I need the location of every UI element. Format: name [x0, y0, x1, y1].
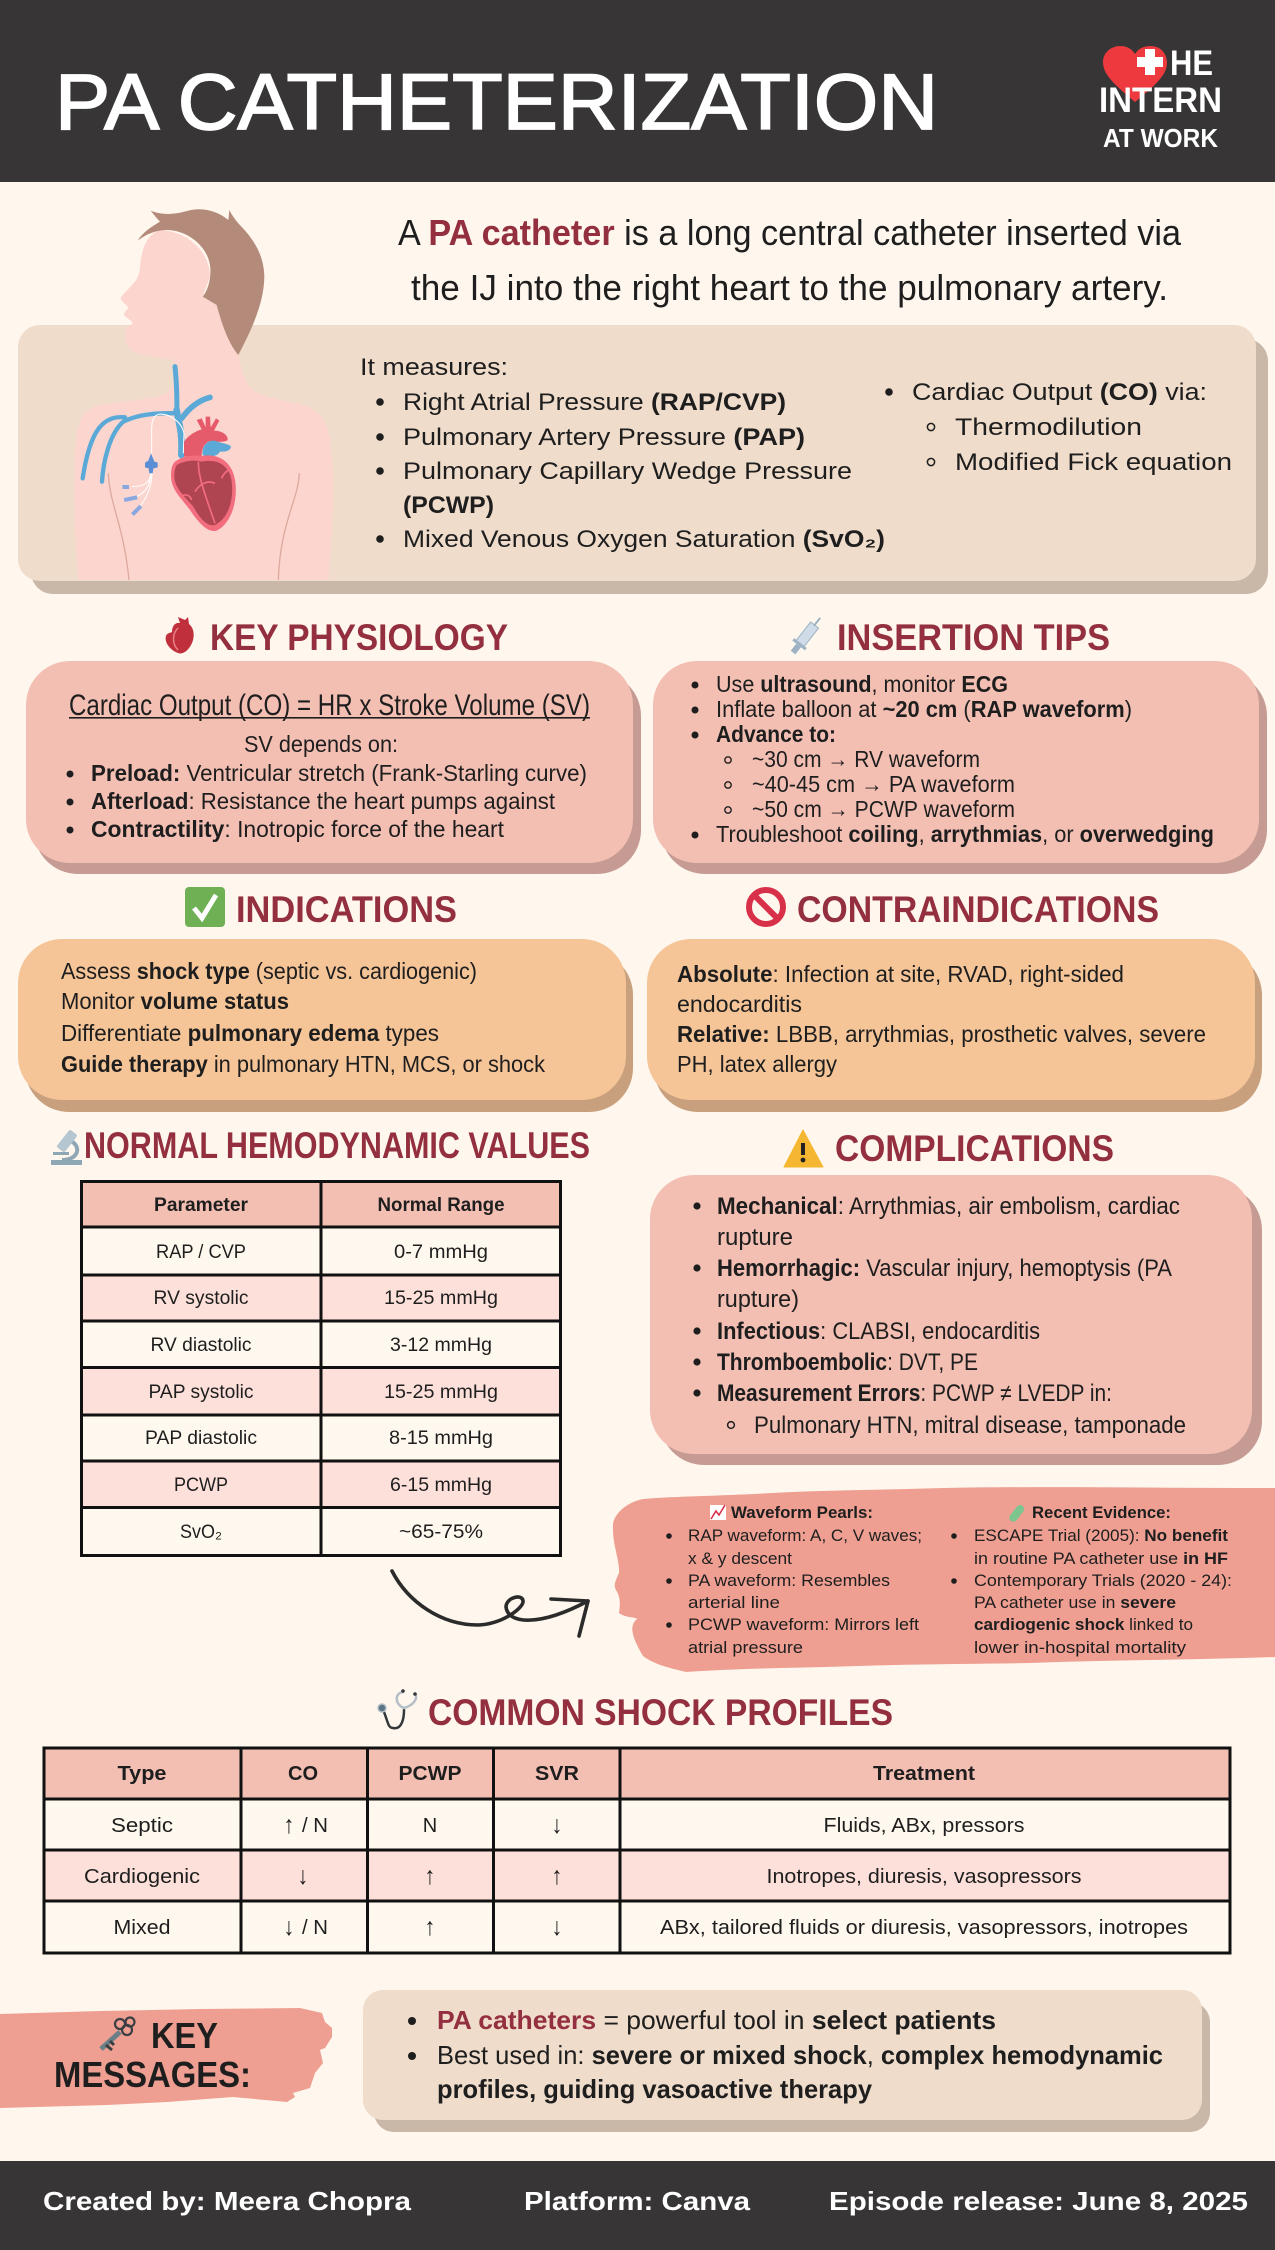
list: insertion steps: Troubleshoot coiling, arrythmias, or overwedging	[716, 821, 1214, 847]
intro statement: the IJ into the right heart to the pulmonary artery.	[411, 267, 1168, 308]
table: normal hemodynamic values: 15-25 mmHg	[384, 1288, 498, 1309]
table: normal hemodynamic values: 0-7 mmHg	[394, 1242, 488, 1263]
table: common shock profiles: / N	[302, 1917, 328, 1939]
table: common shock profiles: SVR	[535, 1763, 580, 1785]
table: common shock profiles: ↑	[284, 1811, 294, 1839]
column: recent evidence: Contemporary Trials (2020 - 24):	[974, 1572, 1232, 1590]
intro statement	[398, 212, 1182, 308]
icon: prohibited sign	[749, 890, 783, 924]
panel: key messages	[363, 1990, 1210, 2132]
table: normal hemodynamic values: PAP systolic	[148, 1382, 254, 1403]
icon: syringe	[787, 613, 826, 657]
list: insertion steps: Advance to:	[716, 721, 836, 747]
heading: indications: INDICATIONS	[236, 889, 457, 930]
table: common shock profiles: N	[423, 1815, 437, 1837]
column: waveform pearls: PA waveform: Resembles	[688, 1572, 890, 1590]
column: waveform pearls: x & y descent	[688, 1550, 792, 1568]
list: indications: Assess shock type (septic vs. cardiogenic)	[61, 958, 477, 984]
list: SV determinants	[66, 760, 587, 842]
heading: complications: COMPLICATIONS	[835, 1128, 1114, 1169]
logo: The Intern at Work	[1099, 44, 1222, 153]
table: normal hemodynamic values: ~65-75%	[399, 1522, 483, 1543]
table: normal hemodynamic values: 3-12 mmHg	[390, 1335, 492, 1356]
column: recent evidence: ESCAPE Trial (2005): No benefit	[974, 1527, 1229, 1545]
table: common shock profiles: ↑	[552, 1862, 562, 1890]
table: common shock profiles: Mixed	[114, 1917, 170, 1939]
list: indications	[61, 958, 545, 1077]
right measures list: Thermodilution	[955, 414, 1142, 441]
list: key messages: PA catheters = powerful tool in select patients	[437, 2005, 996, 2035]
footer band	[0, 2161, 1275, 2250]
left measures list: Mixed Venous Oxygen Saturation (SvO₂)	[403, 526, 885, 553]
column: waveform pearls: RAP waveform: A, C, V waves;	[688, 1527, 922, 1545]
footer: creator: Created by: Meera Chopra	[43, 2186, 412, 2216]
heading: contraindications: CONTRAINDICATIONS	[797, 889, 1159, 930]
left measures list	[360, 354, 885, 553]
left measures list: Pulmonary Capillary Wedge Pressure	[403, 458, 852, 485]
list: key messages: Best used in: severe or mixed shock, complex hemodynamic	[437, 2040, 1163, 2070]
list: key messages	[408, 2005, 1163, 2104]
icon: anatomical heart	[166, 617, 194, 653]
panel: contraindications	[647, 939, 1262, 1112]
table: common shock profiles: Septic	[111, 1815, 173, 1837]
list: complications: Thromboembolic: DVT, PE	[717, 1349, 978, 1376]
table: normal hemodynamic values: 6-15 mmHg	[390, 1475, 492, 1496]
arrow: curly arrow to pearls	[392, 1571, 588, 1636]
header band	[0, 0, 1275, 182]
table: common shock profiles: ↓	[298, 1862, 308, 1890]
list: complications: Measurement Errors: PCWP ≠ LVEDP in:	[717, 1380, 1112, 1407]
column: recent evidence: PA catheter use in severe	[974, 1594, 1176, 1612]
table: common shock profiles: Type	[118, 1763, 166, 1785]
table: normal hemodynamic values: RV diastolic	[150, 1335, 252, 1356]
logo: The Intern at Work: AT WORK	[1103, 123, 1218, 153]
table: normal hemodynamic values: SvO₂	[180, 1522, 222, 1543]
table: common shock profiles	[44, 1748, 1230, 1953]
list: contraindications: Absolute: Infection at site, RVAD, right-sided	[677, 961, 1124, 987]
panel: key physiology	[26, 661, 641, 874]
panel: complications	[650, 1175, 1262, 1465]
list: key messages: profiles, guiding vasoactive therapy	[437, 2074, 873, 2104]
logo: The Intern at Work: HE	[1170, 44, 1213, 83]
panel: insertion tips	[653, 661, 1267, 874]
list: complications: rupture	[717, 1224, 793, 1251]
list: insertion steps: ~30 cm → RV waveform	[752, 746, 980, 772]
callout: key messages label: MESSAGES:	[54, 2054, 251, 2095]
list: complications	[693, 1193, 1186, 1439]
table: common shock profiles: Treatment	[873, 1763, 975, 1785]
column: waveform pearls: Waveform Pearls:	[731, 1504, 873, 1522]
table: common shock profiles: Fluids, ABx, pressors	[824, 1815, 1024, 1837]
table: common shock profiles: ↓	[552, 1811, 562, 1839]
list: complications: Pulmonary HTN, mitral disease, tamponade	[754, 1412, 1186, 1439]
table: common shock profiles: Inotropes, diuresis, vasopressors	[766, 1866, 1082, 1888]
column: recent evidence: Recent Evidence:	[1032, 1504, 1171, 1522]
list: contraindications: Relative: LBBB, arrythmias, prosthetic valves, severe	[677, 1021, 1206, 1047]
column: waveform pearls: PCWP waveform: Mirrors left	[688, 1616, 919, 1634]
list: complications: Infectious: CLABSI, endocarditis	[717, 1318, 1040, 1345]
table: common shock profiles: Cardiogenic	[84, 1866, 200, 1888]
column: recent evidence: lower in-hospital mortality	[974, 1639, 1187, 1657]
list: indications: Monitor volume status	[61, 988, 289, 1014]
text: SV depends on: SV depends on:	[244, 731, 398, 757]
heading: common shock profiles: COMMON SHOCK PROFILES	[428, 1692, 893, 1733]
icon: chart emoji	[710, 1505, 726, 1520]
intro statement: A PA catheter is a long central catheter inserted via	[398, 212, 1182, 253]
list: complications: Hemorrhagic: Vascular injury, hemoptysis (PA	[717, 1255, 1172, 1282]
table: normal hemodynamic values: RV systolic	[154, 1288, 248, 1309]
table: normal hemodynamic values	[81, 1181, 561, 1556]
icon: green check	[185, 887, 225, 927]
title: PA CATHETERIZATION	[55, 57, 938, 146]
table: normal hemodynamic values: RAP / CVP	[156, 1242, 246, 1263]
icon: key	[101, 2018, 134, 2050]
column: waveform pearls: arterial line	[688, 1594, 780, 1612]
table: normal hemodynamic values: Parameter	[154, 1195, 249, 1216]
illustration: patient with PA catheter and heart	[74, 209, 333, 580]
left measures list: Pulmonary Artery Pressure (PAP)	[403, 424, 805, 451]
logo: The Intern at Work: INTERN	[1099, 81, 1222, 120]
list: insertion steps	[692, 671, 1214, 847]
table: common shock profiles: ↑	[424, 1862, 436, 1890]
table: normal hemodynamic values: PAP diastolic	[145, 1428, 257, 1449]
left measures list: (PCWP)	[403, 492, 494, 519]
icon: warning triangle	[784, 1130, 823, 1167]
column: waveform pearls	[666, 1504, 922, 1657]
column: recent evidence: cardiogenic shock linked to	[974, 1616, 1193, 1634]
panel: waveform pearls and recent evidence	[613, 1487, 1275, 1672]
table: common shock profiles: CO	[288, 1763, 318, 1785]
column: recent evidence: in routine PA catheter use in HF	[974, 1550, 1228, 1568]
right measures list: Modified Fick equation	[955, 449, 1232, 476]
table: normal hemodynamic values: 15-25 mmHg	[384, 1382, 498, 1403]
left measures list: Right Atrial Pressure (RAP/CVP)	[403, 389, 786, 416]
footer: release date: Episode release: June 8, 2025	[829, 2186, 1248, 2216]
list: complications: Mechanical: Arrythmias, air embolism, cardiac	[717, 1193, 1180, 1220]
left measures list: It measures:	[360, 354, 508, 381]
callout: key messages label	[0, 2008, 332, 2108]
icon: microscope	[51, 1129, 82, 1165]
list: insertion steps: Inflate balloon at ~20 cm (RAP waveform)	[716, 696, 1132, 722]
table: normal hemodynamic values: PCWP	[174, 1475, 228, 1496]
list: contraindications: PH, latex allergy	[677, 1051, 837, 1077]
list: SV determinants: Preload: Ventricular stretch (Frank-Starling curve)	[91, 760, 587, 786]
right measures list	[885, 379, 1232, 476]
table: common shock profiles: ↓	[552, 1913, 562, 1941]
column: recent evidence	[951, 1503, 1232, 1657]
table: normal hemodynamic values: 8-15 mmHg	[389, 1428, 493, 1449]
footer: platform: Platform: Canva	[524, 2186, 751, 2216]
table: common shock profiles: PCWP	[398, 1763, 462, 1785]
panel: indications	[18, 939, 633, 1112]
heading: key physiology: KEY PHYSIOLOGY	[210, 617, 508, 658]
column: waveform pearls: atrial pressure	[688, 1639, 803, 1657]
table: common shock profiles: / N	[302, 1815, 328, 1837]
list: insertion steps: Use ultrasound, monitor ECG	[716, 671, 1008, 697]
list: SV determinants: Contractility: Inotropic force of the heart	[91, 816, 505, 842]
table: normal hemodynamic values: Normal Range	[378, 1195, 504, 1216]
callout: key messages label: KEY	[151, 2015, 218, 2056]
equation: cardiac output: Cardiac Output (CO) = HR x Stroke Volume (SV)	[69, 689, 590, 722]
list: insertion steps: ~50 cm → PCWP waveform	[752, 796, 1015, 822]
list: insertion steps: ~40-45 cm → PA waveform	[752, 771, 1015, 797]
heading: normal hemodynamic values: NORMAL HEMODYNAMIC VALUES	[84, 1125, 590, 1166]
right measures list: Cardiac Output (CO) via:	[912, 379, 1207, 406]
table: common shock profiles: ABx, tailored fluids or diuresis, vasopressors, inotropes	[660, 1917, 1188, 1939]
list: contraindications: endocarditis	[677, 991, 802, 1017]
table: common shock profiles: ↑	[424, 1913, 436, 1941]
list: indications: Guide therapy in pulmonary HTN, MCS, or shock	[61, 1051, 545, 1077]
list: SV determinants: Afterload: Resistance the heart pumps against	[91, 788, 556, 814]
icon: stethoscope	[378, 1689, 417, 1728]
list: indications: Differentiate pulmonary edema types	[61, 1020, 439, 1046]
icon: test tube emoji	[1008, 1503, 1026, 1523]
panel: what it measures	[18, 209, 1268, 594]
heading: insertion tips: INSERTION TIPS	[837, 617, 1110, 658]
list: contraindications	[677, 961, 1206, 1077]
list: complications: rupture)	[717, 1286, 799, 1313]
table: common shock profiles: ↓	[284, 1913, 294, 1941]
